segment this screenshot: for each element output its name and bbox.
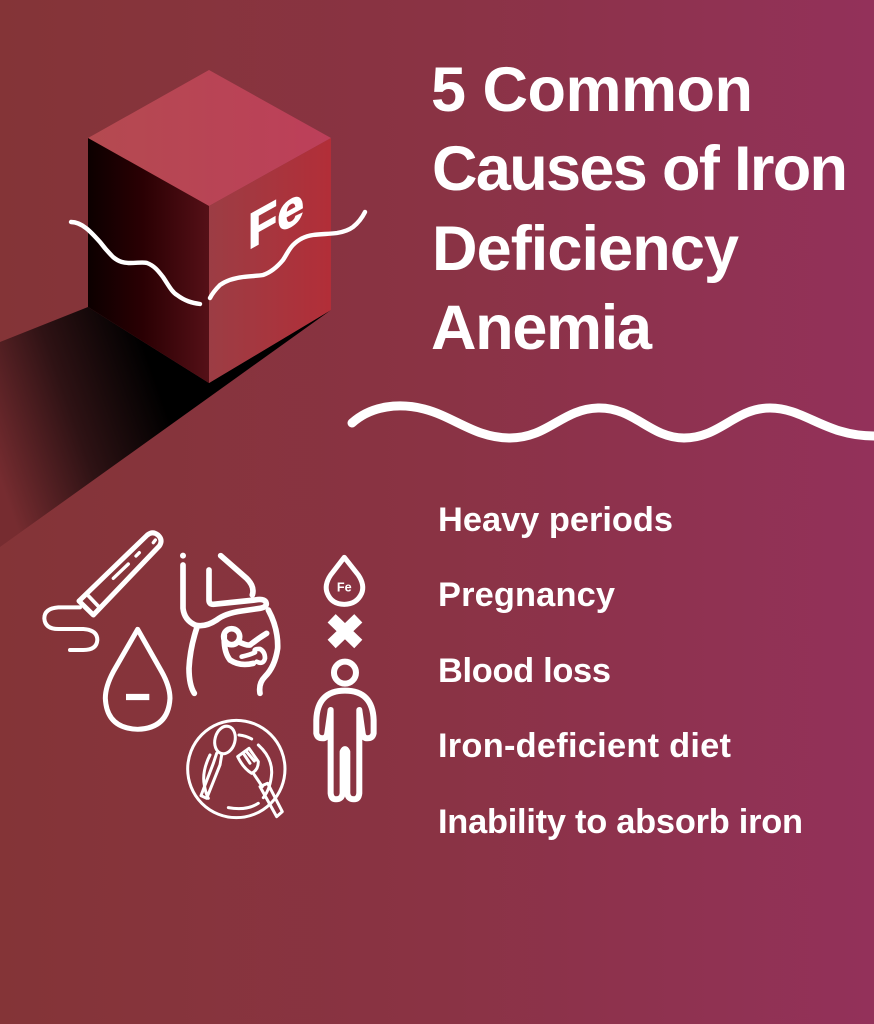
- icon: blood drop with minus: [105, 629, 170, 729]
- title: Anemia: [431, 293, 653, 363]
- iron cube: [71, 70, 365, 383]
- list of causes: Heavy periods: [438, 501, 673, 539]
- list of causes: [438, 501, 803, 841]
- icon: plate with cutlery: [188, 720, 285, 818]
- wave divider: [352, 406, 874, 438]
- cube left face: [88, 138, 209, 383]
- icon: Fe drop: Fe: [337, 580, 352, 594]
- list of causes: Blood loss: [438, 652, 611, 690]
- list of causes: Inability to absorb iron: [438, 803, 803, 841]
- cube shadow: [0, 307, 331, 547]
- icon: person: [316, 662, 374, 799]
- cube top face: [88, 70, 331, 206]
- title: [431, 55, 848, 363]
- wavy line left: [71, 222, 200, 304]
- title: 5 Common: [431, 55, 753, 125]
- list of causes: Pregnancy: [438, 576, 615, 614]
- icon: pregnant woman: [181, 554, 278, 693]
- title: Deficiency: [432, 214, 739, 284]
- icon: tampon: [44, 533, 161, 650]
- icons group: [44, 533, 374, 818]
- title: Causes of Iron: [432, 134, 848, 204]
- cube right face: [209, 138, 331, 383]
- wavy line right: [210, 212, 365, 298]
- Fe label: Fe: [248, 174, 304, 261]
- icon: cross: [332, 618, 358, 644]
- icon: Fe drop: [326, 557, 363, 604]
- list of causes: Iron-deficient diet: [438, 727, 732, 765]
